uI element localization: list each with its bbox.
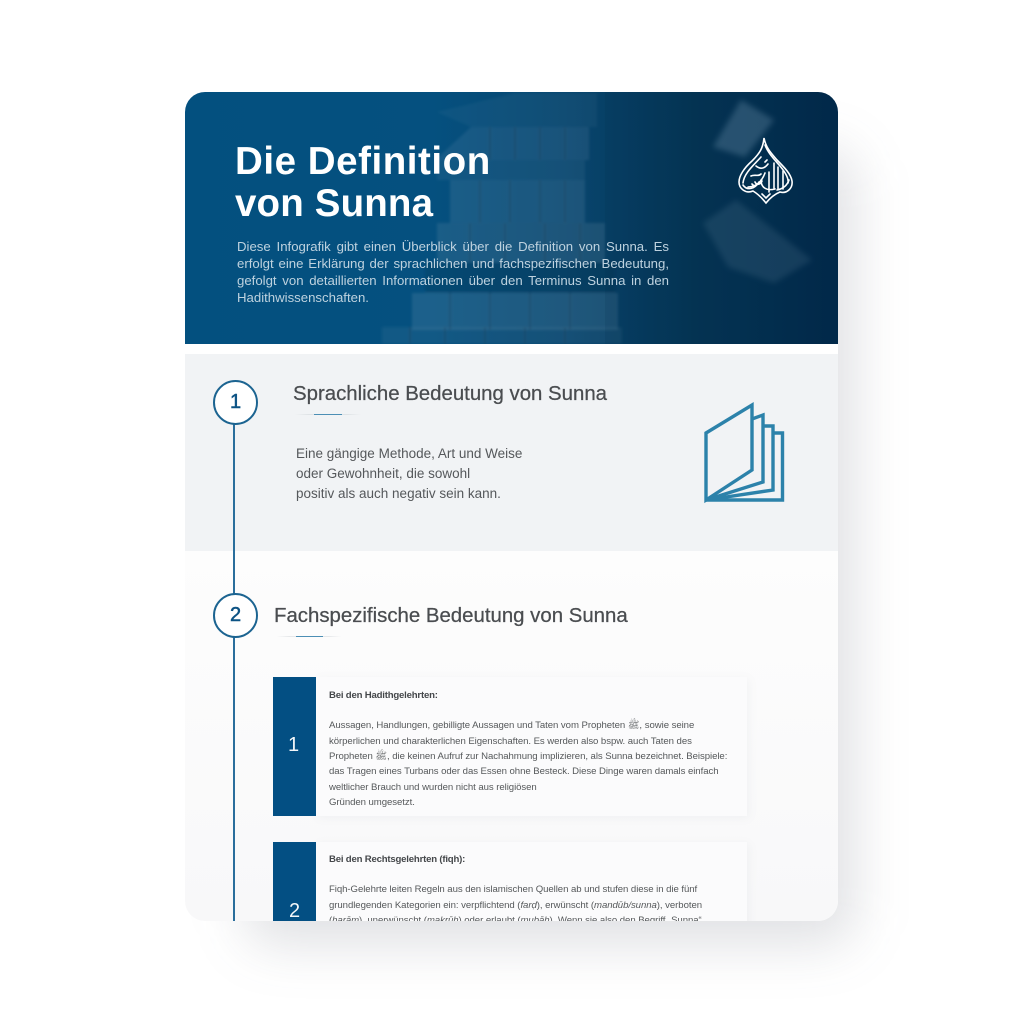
background image: stack of books (382, 96, 809, 344)
text: section 1: positiv als auch negativ sein kann. (296, 486, 501, 501)
heading: section 2: Fachspezifische Bedeutung von Sunna (274, 605, 628, 627)
panel: header (185, 92, 838, 344)
intro text: Diese Infografik gibt einen Überblick über die Definition von Sunna. Es (237, 239, 669, 254)
number block 2 (273, 842, 316, 932)
icon: calligraphy logo (738, 138, 793, 204)
title (235, 140, 491, 225)
text block 1: Gründen umgesetzt. (329, 797, 415, 808)
text panel 2 (316, 842, 747, 932)
step marker 2: 2 (230, 604, 241, 626)
text block 1: weltlicher Brauch und wurden nicht aus religiösen (329, 782, 537, 792)
title: Die Definition (235, 140, 491, 183)
heading: section 1: Sprachliche Bedeutung von Sunna (293, 383, 607, 405)
text block 1: Propheten ﷺ, die keinen Aufruf zur Nachahmung implizieren, als Sunna bezeichnet. Beispiele: (329, 751, 727, 762)
number block 1: 1 (288, 734, 299, 756)
heading underline 2 (276, 636, 342, 637)
title: von Sunna (235, 182, 433, 225)
card shadow (245, 150, 855, 945)
step marker 1: 1 (230, 391, 241, 413)
step marker 1 (213, 380, 258, 425)
infographic card (185, 92, 838, 921)
text block 2: grundlegenden Kategorien ein: verpflichtend (farḍ), erwünscht (mandūb/sunna), verboten (329, 900, 702, 910)
intro text (237, 239, 669, 305)
text panel 1 (316, 677, 747, 816)
text: section 1: oder Gewohnheit, die sowohl (296, 466, 470, 481)
intro text: gefolgt von detaillierten Informationen über den Terminus Sunna in den (237, 273, 669, 288)
step marker 2 (213, 593, 258, 638)
heading underline 1 (295, 414, 361, 415)
text block 2: Fiqh-Gelehrte leiten Regeln aus den islamischen Quellen ab und stufen diese in die fünf (329, 884, 697, 895)
text block 2: Bei den Rechtsgelehrten (fiqh): (329, 854, 465, 865)
text block 1: das Tragen eines Turbans oder das Essen ohne Besteck. Diese Dinge waren damals einfach (329, 766, 718, 777)
intro text: Hadithwissenschaften. (237, 290, 369, 305)
text block 2 (329, 854, 702, 921)
text block 1: Bei den Hadithgelehrten: (329, 690, 438, 701)
text: section 1: Eine gängige Methode, Art und Weise (296, 446, 522, 461)
text block 1: körperlichen und charakterlichen Eigenschaften. Es werden also bspw. auch Taten des (329, 736, 692, 746)
number block 1 (273, 677, 316, 816)
icon: open book (704, 402, 784, 504)
text: section 1 (296, 446, 522, 501)
intro text: erfolgt eine Erklärung der sprachlichen und fachspezifischen Bedeutung, (237, 256, 669, 271)
timeline line (233, 412, 235, 921)
panel: section 2 background (185, 551, 838, 921)
text block 1: Aussagen, Handlungen, gebilligte Aussagen und Taten vom Propheten ﷺ, sowie seine (329, 720, 694, 731)
text block 1 (329, 690, 727, 808)
panel: section 1 background (185, 354, 838, 551)
